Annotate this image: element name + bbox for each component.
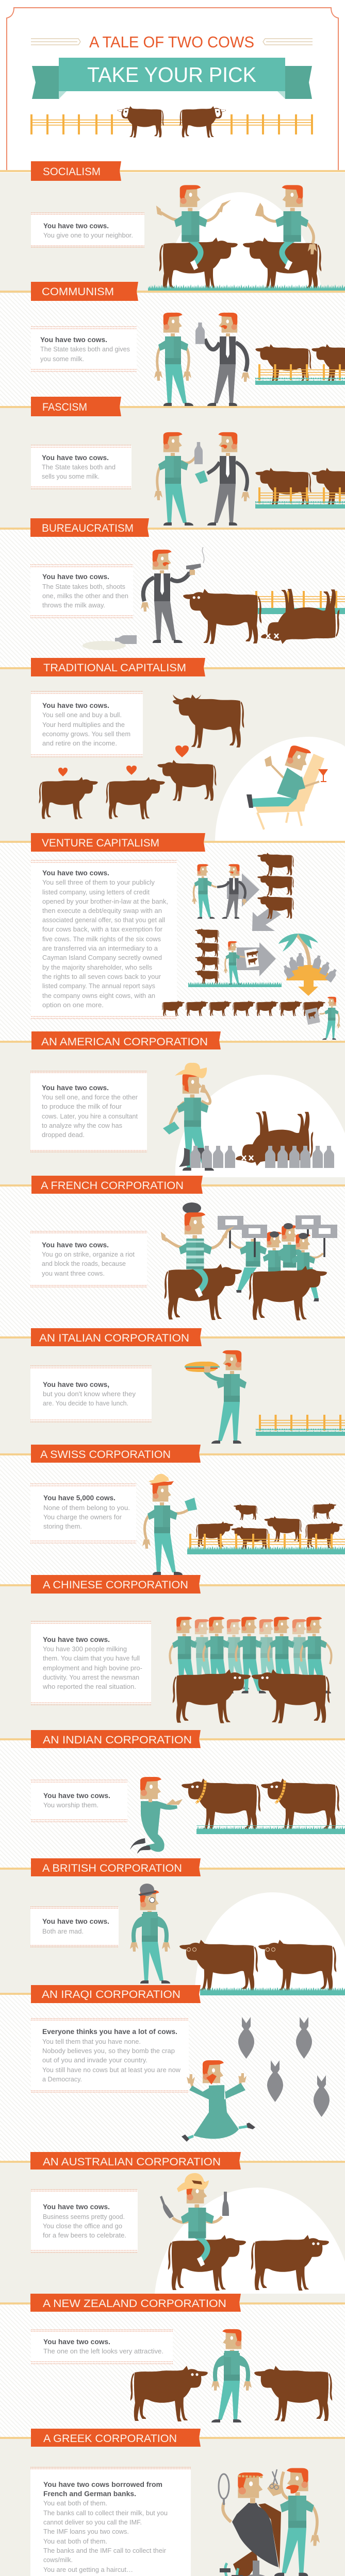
ribbon: fascism: FASCISM — [42, 401, 87, 413]
text block: You go on strike, organize a riot — [42, 1250, 135, 1258]
text block: You have two cows. — [43, 222, 109, 230]
text block: You have two cows. — [43, 2203, 110, 2211]
text block: listed company, using letters of credit — [42, 888, 150, 896]
ribbon: traditional capitalism — [0, 658, 345, 676]
text block: You have two cows. — [42, 1084, 109, 1092]
text block: the company owns eight cows, with an — [42, 992, 155, 999]
ribbon: venture capitalism: VENTURE CAPITALISM — [42, 837, 159, 849]
ribbon: italian corporation: AN ITALIAN CORPORATION — [39, 1332, 189, 1344]
panel: swiss corporation — [0, 1445, 345, 1575]
illustration: rows of workers and two cows — [170, 1617, 332, 1723]
text block: out of you and invade your country. — [42, 2056, 147, 2064]
text block: You have two cows. — [42, 454, 109, 462]
text block: sells you some milk. — [42, 472, 100, 480]
text block: You sell one, and force the other — [42, 1093, 138, 1101]
title ornament left — [31, 39, 80, 45]
text block — [31, 2330, 173, 2364]
text block: Nobody believes you, so they bomb the crap — [42, 2047, 175, 2055]
text block — [31, 327, 137, 371]
text block: You have two cows borrowed from — [43, 2481, 162, 2488]
panel: indian corporation — [0, 1730, 345, 1854]
text block: You have two cows. — [40, 336, 107, 344]
text block: to analyze why the cow has — [42, 1122, 122, 1129]
text block — [31, 1780, 127, 1822]
title: A TALE OF TWO COWS — [89, 33, 254, 51]
ribbon: indian corporation: AN INDIAN CORPORATION — [43, 1734, 192, 1746]
illustration: man with beers on cow — [155, 2173, 345, 2294]
illustration: barber and man in chair — [219, 2468, 320, 2576]
text block: the rights to all seven cows back to your — [42, 973, 161, 980]
text block: Both are mad. — [42, 1927, 84, 1935]
illustration: man with sandwich and empty fence — [185, 1350, 345, 1444]
text block — [31, 2190, 138, 2252]
text block: The State takes both, shoots — [42, 583, 125, 590]
text block: by the majority shareholder, who sells — [42, 963, 152, 971]
text block: throws the milk away. — [42, 601, 105, 609]
text block: You have two cows. — [42, 1918, 109, 1925]
ribbon: chinese corporation — [0, 1575, 345, 1594]
text block: cannot deliver so you call the IMF. — [43, 2518, 142, 2526]
text block: You tell them that you have none. — [42, 2038, 141, 2045]
text block: ductivity. You arrest the newsman — [43, 1673, 139, 1681]
panel: bureaucratism — [0, 518, 345, 650]
illustration: official shoots cow — [83, 547, 345, 650]
text block: one, milks the other and then — [42, 592, 128, 600]
ribbon: new zealand corporation — [0, 2294, 345, 2312]
text block: four cows back, with a tax exemption for — [42, 925, 163, 933]
panel: french corporation — [0, 1176, 345, 1320]
text block: You have two cows. — [43, 1792, 110, 1800]
ribbon: swiss corporation: A SWISS CORPORATION — [40, 1449, 171, 1461]
fence with two cows — [30, 106, 313, 138]
text block: storing them. — [43, 1522, 82, 1530]
text block: dropped dead. — [42, 1131, 85, 1139]
text block: You worship them. — [43, 1801, 98, 1809]
text block: You are out getting a haircut… — [43, 2566, 133, 2573]
ribbon: british corporation — [0, 1858, 345, 1876]
ribbon: communism: COMMUNISM — [42, 286, 114, 298]
text block — [30, 1231, 147, 1287]
text block: and block the roads, because — [42, 1260, 126, 1267]
text block — [31, 860, 177, 1019]
text block: You have two cows. — [42, 1241, 109, 1249]
text block: to produce the milk of four — [42, 1103, 122, 1110]
banner — [32, 58, 312, 99]
ribbon: swiss corporation — [0, 1445, 345, 1463]
text block: You have two cows, — [43, 1381, 109, 1388]
illustration: two men on cows — [148, 185, 345, 293]
text block: The one on the left looks very attractive. — [43, 2347, 163, 2355]
text block: You still have no cows but at least you are now — [42, 2066, 181, 2074]
panel: socialism — [0, 161, 345, 293]
panel: australian corporation — [0, 2152, 345, 2294]
panel: chinese corporation — [0, 1575, 345, 1723]
text block: You have two cows. — [43, 1636, 110, 1643]
ribbon: italian corporation — [0, 1328, 345, 1346]
text block: You charge the owners for — [43, 1513, 122, 1521]
panel: iraqi corporation — [0, 1985, 330, 2142]
ribbon: venture capitalism — [0, 833, 345, 852]
text block: are transferred via an intermediary to a — [42, 944, 158, 952]
illustration: venture flow diagram — [162, 853, 340, 1040]
text block: for a few beers to celebrate. — [43, 2231, 126, 2239]
text block: a Democracy. — [42, 2075, 82, 2083]
illustration: banker and many cows — [142, 1474, 345, 1575]
text block: You close the office and go — [43, 2222, 122, 2230]
panel: new zealand corporation — [0, 2294, 345, 2422]
ribbon: american corporation: AN AMERICAN CORPORATION — [41, 1036, 208, 1048]
text block: The banks and the IMF call to collect their — [43, 2547, 167, 2554]
text block: opened by your brother-in-law at the bank, — [42, 897, 168, 905]
text block: You have 5,000 cows. — [43, 1494, 116, 1502]
illustration: bull, cows, retired man — [39, 694, 345, 842]
text block: You sell one and buy a bull. — [42, 711, 122, 719]
text block — [30, 1907, 119, 1947]
text block: You have two cows. — [42, 702, 109, 709]
text block: You sell three of them to your publicly — [42, 878, 155, 886]
text block — [31, 2019, 189, 2092]
text block: You eat both of them. — [43, 2537, 107, 2545]
ribbon: bureaucratism: BUREAUCRATISM — [42, 522, 134, 534]
ribbon: american corporation — [0, 1031, 345, 1049]
ribbon: french corporation — [0, 1176, 345, 1194]
text block: French and German banks. — [43, 2490, 136, 2498]
ribbon: greek corporation — [0, 2429, 345, 2447]
text block: but you don't know where they — [43, 1390, 136, 1398]
text block: The banks call to collect their milk, but you — [43, 2509, 168, 2517]
illustration: strikers with signs — [161, 1202, 337, 1320]
text block — [31, 1621, 151, 1705]
ribbon: australian corporation — [0, 2152, 345, 2170]
text block: then execute a debt/equity swap with an — [42, 907, 162, 914]
text block: The State takes both and gives — [40, 345, 130, 353]
ribbon: greek corporation: A GREEK CORPORATION — [43, 2433, 177, 2445]
text block — [30, 1366, 152, 1422]
text block: The IMF loans you two cows. — [43, 2528, 129, 2535]
banner: TAKE YOUR PICK — [87, 63, 256, 87]
ribbon: traditional capitalism: TRADITIONAL CAPITALISM — [43, 662, 186, 674]
top frame — [7, 8, 338, 170]
text block: You have two cows. — [42, 573, 109, 581]
text block — [30, 565, 133, 618]
ribbon: iraqi corporation — [0, 1985, 201, 2003]
illustration: man worshipping cows — [130, 1777, 345, 1854]
ribbon: bureaucratism — [0, 518, 345, 537]
text block: are. You decide to have lunch. — [43, 1399, 128, 1407]
text block: You have two cows. — [43, 2338, 110, 2346]
illustration: running man and falling bombs — [182, 2017, 330, 2142]
text block: You have 300 people milking — [43, 1645, 127, 1653]
ribbon: socialism: SOCIALISM — [43, 166, 101, 178]
text block: you some milk. — [40, 355, 84, 363]
text block: Cayman Island Company secretly owned — [42, 954, 162, 961]
text block — [30, 1484, 136, 1543]
ribbon: british corporation: A BRITISH CORPORATION — [42, 1862, 182, 1874]
text block: Business seems pretty good. — [43, 2213, 125, 2221]
text block: cows. Later, you hire a consultant — [42, 1112, 138, 1120]
text block: five cows. The milk rights of the six cows — [42, 935, 161, 943]
text block: None of them belong to you. — [43, 1504, 130, 1512]
panel: communism — [0, 282, 345, 406]
ribbon: socialism — [0, 161, 345, 181]
text block — [31, 691, 143, 757]
text block: The State takes both and — [42, 463, 116, 471]
ribbon: new zealand corporation: A NEW ZEALAND CORPORATION — [43, 2298, 226, 2310]
text block — [30, 1071, 147, 1152]
text block: You eat both of them. — [43, 2499, 107, 2507]
text block: economy grows. You sell them — [42, 730, 130, 738]
panel: traditional capitalism — [0, 658, 345, 842]
text block — [31, 445, 132, 489]
panel: italian corporation — [0, 1328, 345, 1444]
panel: greek corporation — [0, 2429, 345, 2576]
illustration: british man and mad cows — [130, 1884, 345, 1995]
text block: who reported the real situation. — [42, 1683, 136, 1690]
illustration: official selling milk — [154, 432, 345, 526]
text block: employment and high bovine pro- — [43, 1664, 142, 1672]
panel: fascism — [0, 397, 345, 526]
text block — [31, 213, 144, 247]
header panel — [7, 8, 338, 170]
text block: them. You claim that you have full — [43, 1654, 140, 1662]
ribbon: fascism — [0, 397, 345, 416]
text block: option on one more. — [42, 1001, 104, 1009]
ribbon: iraqi corporation: AN IRAQI CORPORATION — [42, 1989, 180, 2001]
text block: Your herd multiplies and the — [42, 721, 125, 728]
illustration: cowboy, dead cow, milk bottles — [163, 1063, 345, 1177]
text block: associated general offer, so that you get all — [42, 916, 165, 924]
ribbon: communism — [0, 282, 345, 301]
text block: Everyone thinks you have a lot of cows. — [42, 2028, 177, 2036]
ribbon: chinese corporation: A CHINESE CORPORATION — [43, 1579, 188, 1591]
panel: american corporation — [0, 1031, 345, 1177]
text block: and retire on the income. — [42, 739, 117, 747]
text block: You have two cows. — [42, 869, 109, 877]
ribbon: australian corporation: AN AUSTRALIAN CORPORATION — [43, 2156, 221, 2168]
text block — [30, 2467, 191, 2576]
panel: venture capitalism — [0, 833, 345, 1040]
panel: british corporation — [0, 1858, 345, 1995]
illustration: man between two cows — [130, 2329, 332, 2422]
text block: cows/milk. — [43, 2556, 73, 2564]
illustration: state official with milk bottle — [154, 313, 345, 406]
ribbon: french corporation: A FRENCH CORPORATION — [41, 1180, 184, 1192]
title ornament right — [263, 39, 313, 45]
text block: you want three cows. — [42, 1269, 105, 1277]
ribbon: indian corporation — [0, 1730, 345, 1748]
text block: listed company. The annual report says — [42, 982, 155, 990]
text block: You give one to your neighbor. — [43, 231, 133, 239]
